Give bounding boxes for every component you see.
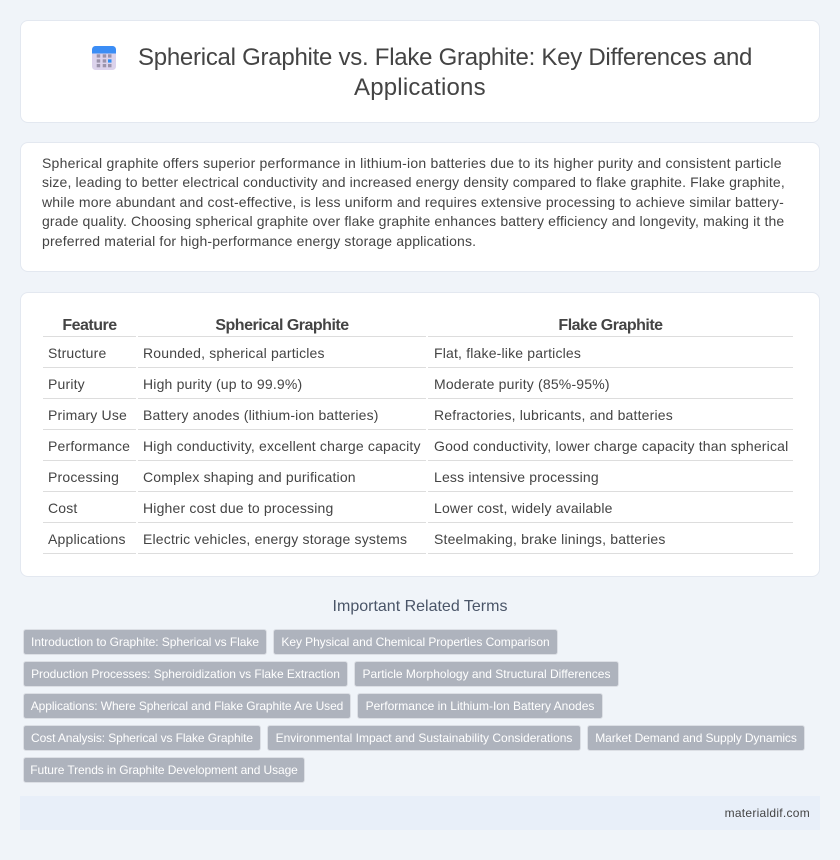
intro text: preferred material for high-performance energy storage applications. [42, 233, 476, 249]
row: processing: Complex shaping and purification [143, 469, 356, 485]
tag: Applications: Where Spherical and Flake Graphite Are Used [31, 699, 343, 713]
intro text: grade quality. Choosing spherical graphite over flake graphite enhances battery efficiency and longevity, making it the [42, 213, 784, 229]
icon: calendar [92, 46, 116, 70]
tag: Performance in Lithium-Ion Battery Anodes [366, 699, 594, 713]
tag [23, 725, 261, 751]
row: cost: Higher cost due to processing [143, 500, 333, 516]
title: Applications [354, 74, 486, 101]
row: applications: Electric vehicles, energy storage systems [143, 531, 407, 547]
row: applications: Steelmaking, brake linings, batteries [434, 531, 666, 547]
intro text [42, 155, 785, 249]
tag [273, 629, 558, 655]
tag: Introduction to Graphite: Spherical vs Flake [31, 635, 259, 649]
row: processing [48, 469, 599, 485]
row: applications [48, 531, 666, 547]
table header: Flake Graphite [558, 317, 663, 334]
tag: Environmental Impact and Sustainability Considerations [276, 731, 572, 745]
table header [62, 317, 663, 334]
row: performance: High conductivity, excellent charge capacity [143, 438, 421, 454]
title [138, 44, 752, 101]
row: purity: Purity [48, 376, 85, 392]
row: cost [48, 500, 613, 516]
table header: Spherical Graphite [215, 317, 349, 334]
tag [354, 661, 619, 687]
related terms tags [23, 629, 805, 783]
intro panel [20, 142, 820, 272]
row: purity: High purity (up to 99.9%) [143, 376, 302, 392]
row: cost: Cost [48, 500, 78, 516]
header panel [20, 20, 820, 123]
tag [267, 725, 581, 751]
tag: Key Physical and Chemical Properties Comparison [281, 635, 550, 649]
intro text: while more abundant and cost-effective, is less uniform and requires extensive processing to achieve similar battery- [42, 194, 784, 210]
tag [587, 725, 805, 751]
tag: Market Demand and Supply Dynamics [595, 731, 797, 745]
row: structure: Flat, flake-like particles [434, 345, 581, 361]
row: purity: Moderate purity (85%-95%) [434, 376, 610, 392]
footer source: materialdif.com [725, 806, 810, 820]
related terms heading: Important Related Terms [333, 598, 507, 615]
intro text: size, leading to better electrical conductivity and increased energy density compared to flake graphite. Flake graphite, [42, 174, 785, 190]
row: primary use: Primary Use [48, 407, 127, 423]
table header: Feature [62, 317, 117, 334]
row: performance: Good conductivity, lower charge capacity than spherical [434, 438, 788, 454]
intro text: Spherical graphite offers superior performance in lithium-ion batteries due to its higher purity and consistent particle [42, 155, 782, 171]
row: primary use: Battery anodes (lithium-ion batteries) [143, 407, 379, 423]
tag [23, 661, 348, 687]
row: cost: Lower cost, widely available [434, 500, 613, 516]
row: structure [48, 345, 581, 361]
tag [23, 693, 351, 719]
row: processing: Processing [48, 469, 119, 485]
tag: Production Processes: Spheroidization vs Flake Extraction [31, 667, 340, 681]
row: primary use: Refractories, lubricants, and batteries [434, 407, 673, 423]
tag: Particle Morphology and Structural Differences [363, 667, 610, 681]
tag [357, 693, 603, 719]
row: performance [48, 438, 788, 454]
tag [23, 757, 305, 783]
row: structure: Structure [48, 345, 106, 361]
tag: Cost Analysis: Spherical vs Flake Graphite [31, 731, 253, 745]
row: performance: Performance [48, 438, 130, 454]
row: processing: Less intensive processing [434, 469, 599, 485]
tag: Future Trends in Graphite Development and Usage [30, 763, 298, 777]
row: primary use [48, 407, 673, 423]
tag [23, 629, 267, 655]
footer bar [20, 796, 820, 830]
row: purity [48, 376, 610, 392]
title: Spherical Graphite vs. Flake Graphite: Key Differences and [138, 44, 752, 71]
comparison table panel [20, 292, 820, 577]
row: applications: Applications [48, 531, 126, 547]
row: structure: Rounded, spherical particles [143, 345, 325, 361]
